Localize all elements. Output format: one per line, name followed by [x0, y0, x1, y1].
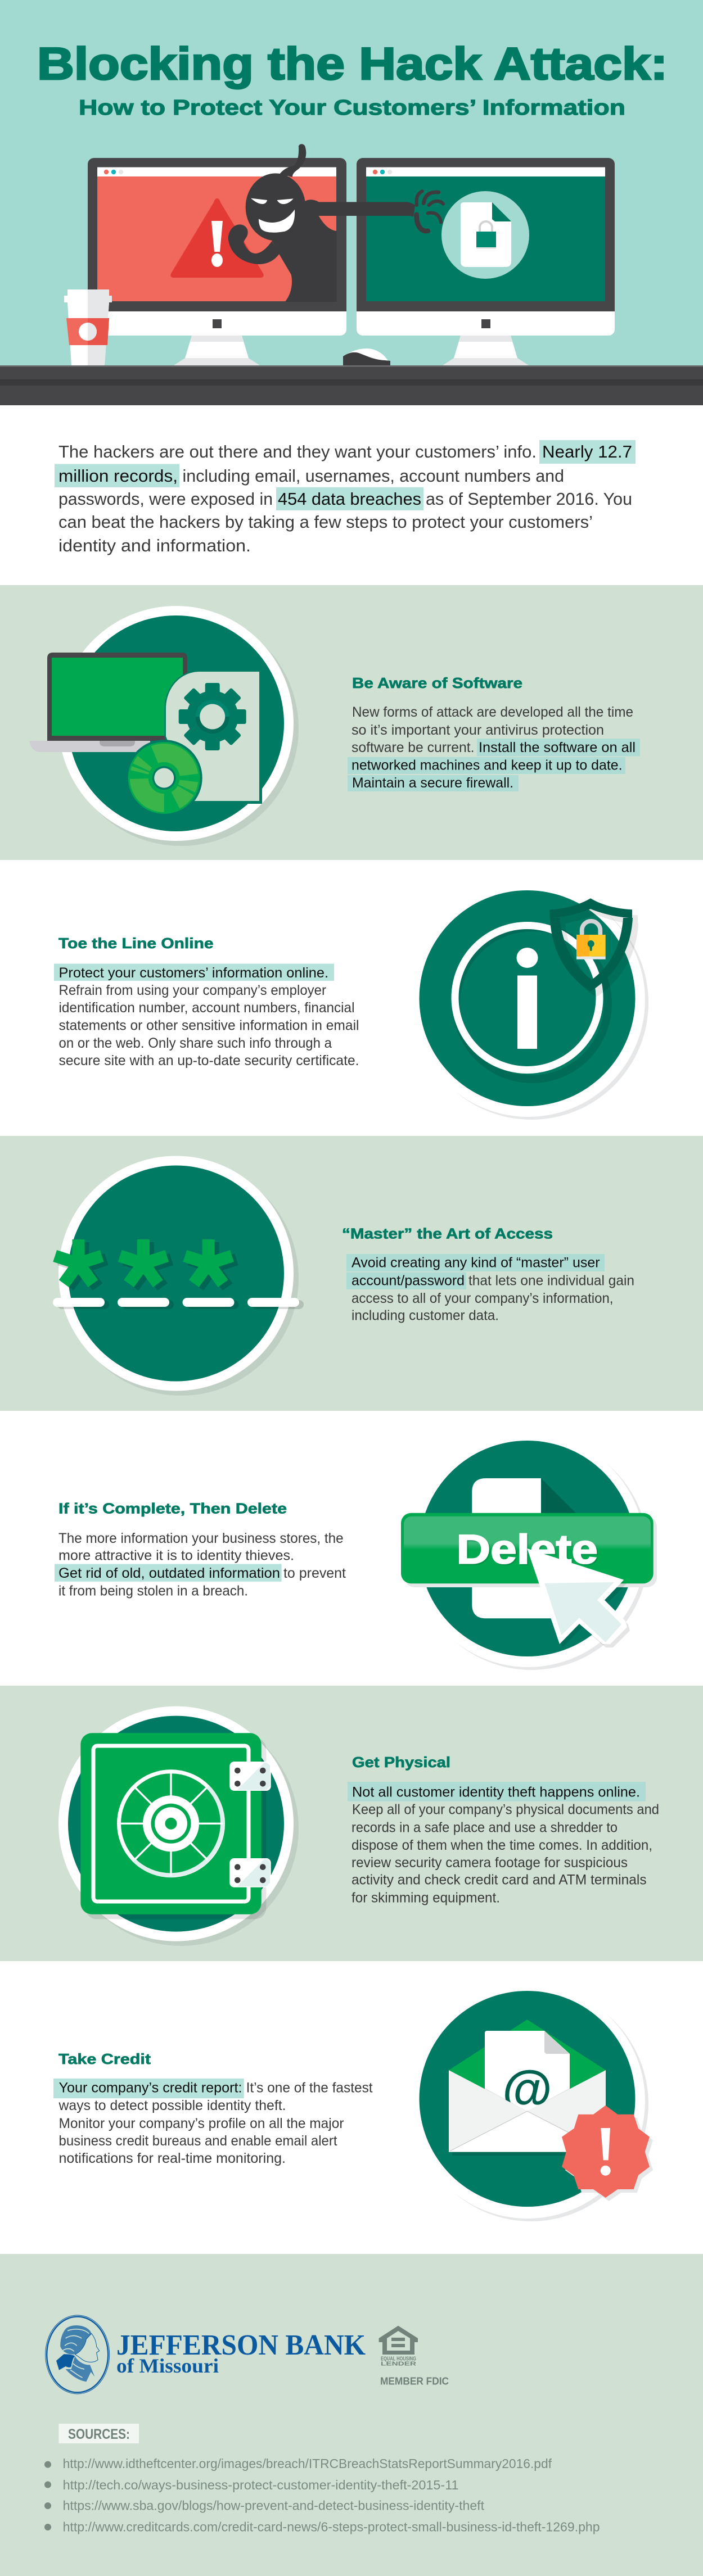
right monitor stand — [443, 336, 529, 365]
icon: delete button with cursor — [401, 1433, 657, 1670]
body text: The more information your business stores, the — [58, 1531, 344, 1546]
sources list: http://www.idtheftcenter.org/images/breach/ITRCBreachStatsReportSummary2016.pdf — [63, 2456, 552, 2471]
coffee cup — [64, 289, 112, 365]
body text: access to all of your company’s information, — [352, 1291, 613, 1306]
panel: get physical — [0, 1686, 703, 1961]
icon: email envelope with alert badge — [410, 1984, 653, 2221]
title: Blocking the Hack Attack: — [37, 39, 668, 89]
panel: introduction — [0, 405, 703, 585]
left monitor stand — [174, 336, 260, 365]
body text — [348, 1782, 659, 1906]
logo: Jefferson Bank of Missouri: of Missouri — [116, 2355, 219, 2377]
body text — [55, 1531, 346, 1599]
panel: footer — [0, 2254, 703, 2576]
body text: secure site with an up-to-date security certificate. — [58, 1053, 359, 1069]
icon: safe — [58, 1706, 299, 1946]
panel: if it's complete, then delete — [0, 1411, 703, 1686]
sources label: SOURCES: — [68, 2426, 130, 2442]
body text: software be current. — [352, 740, 475, 755]
computer mouse — [343, 348, 390, 365]
panel: introduction: passwords, were exposed in — [58, 489, 273, 509]
hacker eyes and grin — [251, 198, 295, 233]
sources list: https://www.sba.gov/blogs/how-prevent-and-detect-business-identity-theft — [63, 2498, 485, 2512]
body text: networked machines and keep it up to date. — [352, 758, 622, 773]
icon: information with shield and lock — [411, 883, 648, 1120]
body text: ways to detect possible identity theft. — [58, 2098, 286, 2113]
heading: Toe the Line Online — [58, 935, 214, 952]
icon: locked file — [441, 191, 529, 279]
body text: Avoid creating any kind of “master” user — [352, 1255, 600, 1271]
body text: activity and check credit card and ATM terminals — [352, 1872, 647, 1888]
body text: more attractive it is to identity thieves. — [58, 1548, 294, 1564]
body text: statements or other sensitive information in email — [58, 1017, 359, 1033]
body text: Keep all of your company’s physical documents and — [352, 1802, 659, 1818]
logo: Jefferson Bank of Missouri: JEFFERSON BANK — [116, 2329, 366, 2361]
right monitor — [357, 158, 615, 336]
body text — [53, 2079, 373, 2166]
body text — [346, 1254, 634, 1323]
body text: that lets one individual gain — [468, 1273, 634, 1289]
icon: delete button with cursor: Delete — [457, 1527, 598, 1573]
panel: introduction: 454 data breaches — [278, 489, 421, 509]
body text: identification number, account numbers, financial — [58, 1000, 354, 1016]
panel: master the art of access — [0, 1136, 703, 1411]
body text: Refrain from using your company’s employer — [58, 983, 326, 998]
icon: warning triangle — [170, 198, 264, 278]
member FDIC: MEMBER FDIC — [380, 2375, 449, 2387]
body text: New forms of attack are developed all the time — [352, 704, 633, 720]
panel: toe the line online — [0, 860, 703, 1136]
body text: Monitor your company’s profile on all the major — [58, 2116, 344, 2131]
body text: records in a safe place and use a shredder to — [352, 1820, 618, 1836]
body text: including customer data. — [352, 1307, 499, 1323]
desk — [0, 365, 703, 405]
logo: Jefferson Bank of Missouri — [46, 2315, 366, 2394]
hacker figure — [228, 144, 443, 302]
body text: business credit bureaus and enable email alert — [58, 2133, 337, 2149]
icon: password asterisks — [53, 1156, 304, 1396]
sources list: http://www.creditcards.com/credit-card-news/6-steps-protect-small-business-id-theft-1269.php — [63, 2519, 600, 2534]
heading: “Master” the Art of Access — [342, 1225, 553, 1242]
panel: introduction: identity and information. — [58, 536, 251, 555]
body text — [348, 704, 640, 791]
panel: take credit — [0, 1961, 703, 2254]
body text: It’s one of the fastest — [246, 2080, 373, 2096]
heading: Take Credit — [58, 2050, 151, 2067]
body text: it from being stolen in a breach. — [58, 1583, 248, 1599]
sources label — [58, 2424, 139, 2443]
body text: Your company’s credit report: — [58, 2080, 242, 2096]
subtitle: How to Protect Your Customers’ Information — [79, 96, 625, 120]
body text: Protect your customers’ information online. — [58, 965, 328, 981]
panel: introduction: including email, usernames, account numbers and — [182, 466, 564, 486]
icon: email envelope with alert badge: @ — [502, 2061, 552, 2118]
sources list — [44, 2456, 600, 2534]
panel: introduction: The hackers are out there and they want your customers’ info. — [58, 442, 537, 461]
body text: dispose of them when the time comes. In addition, — [352, 1837, 652, 1853]
body text: Install the software on all — [479, 740, 636, 755]
body text: so it’s important your antivirus protection — [352, 722, 604, 738]
body text: on or the web. Only share such info through a — [58, 1035, 332, 1051]
sources list: http://tech.co/ways-business-protect-customer-identity-theft-2015-11 — [63, 2478, 459, 2492]
body text: account/password — [352, 1273, 465, 1289]
body text: for skimming equipment. — [352, 1890, 500, 1906]
body text: review security camera footage for suspicious — [352, 1855, 628, 1871]
heading: Get Physical — [352, 1754, 450, 1771]
panel: header hero — [0, 0, 703, 405]
heading: If it’s Complete, Then Delete — [58, 1500, 287, 1517]
icon: laptop, software file and disc — [29, 606, 299, 846]
body text: notifications for real-time monitoring. — [58, 2151, 286, 2166]
body text: Not all customer identity theft happens online. — [352, 1784, 640, 1800]
body text: to prevent — [283, 1565, 346, 1581]
panel: introduction: Nearly 12.7 — [542, 442, 632, 461]
icon: equal housing lender — [379, 2326, 418, 2367]
panel: introduction: million records, — [58, 466, 178, 486]
body text: Maintain a secure firewall. — [352, 775, 513, 791]
panel: introduction: as of September 2016. You — [426, 489, 632, 509]
icon: equal housing lender: EQUAL HOUSING — [381, 2356, 416, 2362]
panel: introduction: can beat the hackers by taking a few steps to protect your customers’ — [58, 512, 593, 532]
panel: be aware of software — [0, 585, 703, 860]
body text — [54, 963, 359, 1069]
heading: Be Aware of Software — [352, 674, 522, 691]
icon: equal housing lender: LENDER — [381, 2361, 417, 2367]
left monitor — [88, 158, 346, 336]
body text: Get rid of old, outdated information — [58, 1565, 280, 1581]
